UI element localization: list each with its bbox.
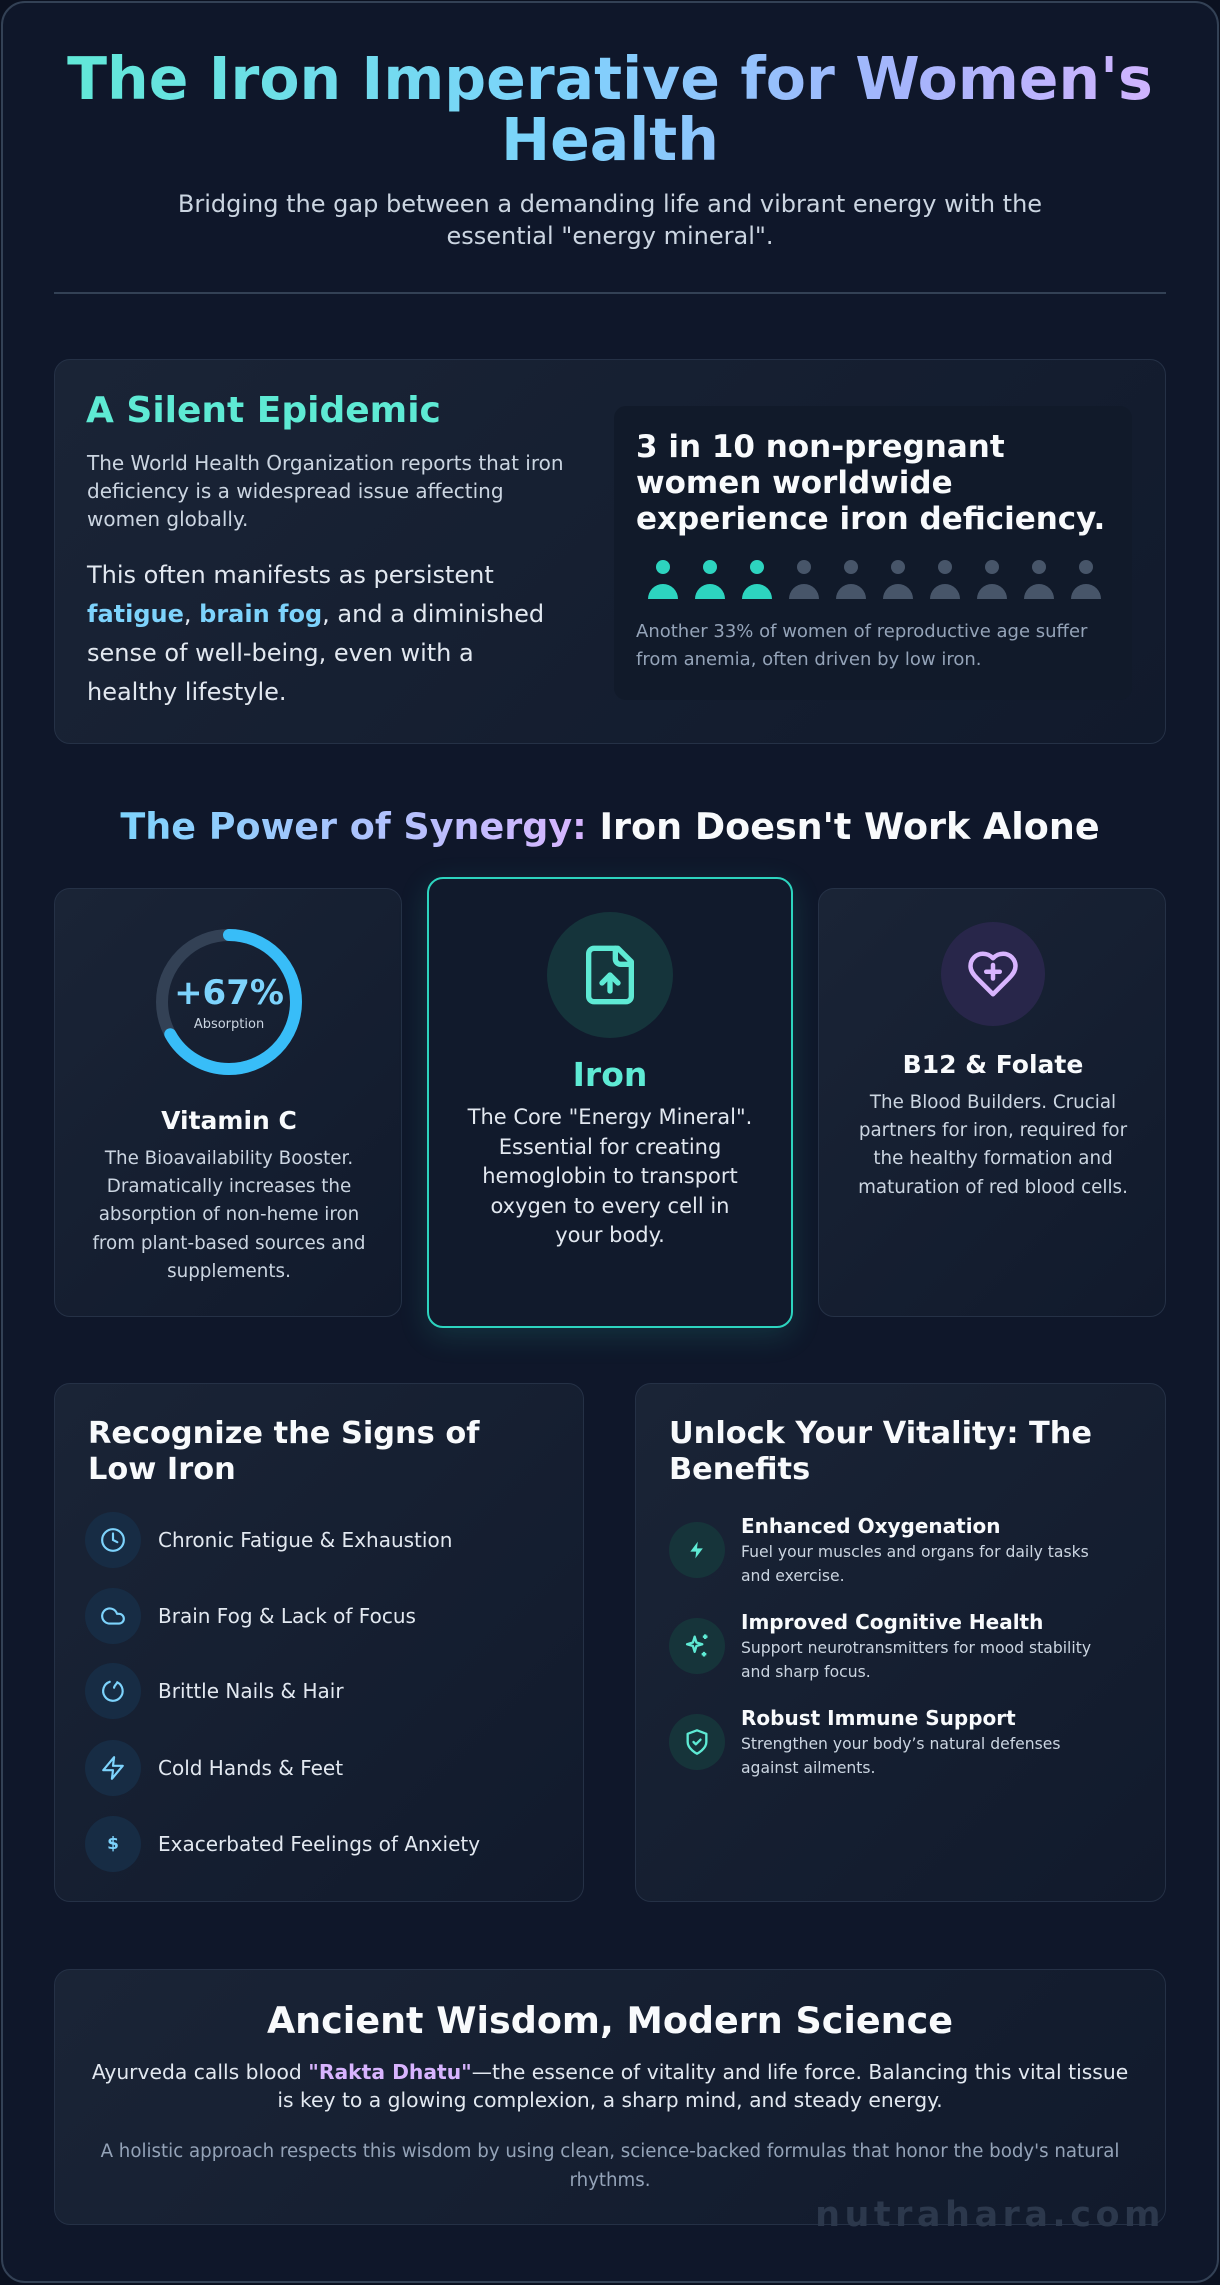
stat box (614, 406, 1132, 700)
benefit: oxygenation: Enhanced Oxygenation (741, 1514, 1001, 1538)
panel: signs of low iron (54, 1383, 584, 1902)
text: holistic: A holistic approach respects this wisdom by using clean, science-backed formulas that honor the body's natural rhythms. (101, 2141, 1119, 2191)
heading: Recognize the Signs of Low Iron (88, 1416, 479, 1487)
benefit: cognitive: Support neurotransmitters for mood stability and sharp focus. (741, 1639, 1091, 1681)
icon: heart plus (941, 922, 1045, 1026)
panel: benefits (635, 1383, 1166, 1902)
benefit: oxygenation (669, 1514, 1089, 1585)
card: iron (427, 877, 793, 1328)
benefit: oxygenation: Fuel your muscles and organs for daily tasks and exercise. (741, 1543, 1089, 1585)
panel: silent epidemic (54, 359, 1166, 744)
panel: ancient wisdom (54, 1969, 1166, 2225)
donut chart: +67% (174, 973, 284, 1013)
benefit: immune: Robust Immune Support (741, 1706, 1016, 1730)
synergy heading: The Power of Synergy: Iron Doesn't Work Alone (120, 805, 1100, 848)
sign: nails (85, 1663, 344, 1719)
title: The Iron Imperative for Women's Health (67, 45, 1153, 174)
text: symptoms: This often manifests as persistent fatigue, brain fog, and a diminished sense of well-being, even with a healthy lifestyle. (87, 561, 544, 706)
people icons (648, 560, 1101, 599)
card: b12 folate (818, 888, 1166, 1317)
sign: fatigue (85, 1512, 452, 1568)
title: Iron (573, 1055, 647, 1094)
title: Vitamin C (161, 1106, 297, 1135)
text: WHO report: The World Health Organization reports that iron deficiency is a widespread issue affecting women globally. (87, 451, 564, 531)
sign: cold (85, 1740, 343, 1796)
donut chart (156, 929, 302, 1075)
sign: brain fog (85, 1588, 416, 1644)
benefit: cognitive (669, 1610, 1091, 1681)
donut chart: Absorption (194, 1017, 264, 1032)
benefit: immune: Strengthen your body’s natural defenses against ailments. (741, 1735, 1061, 1777)
card: vitamin c (54, 888, 402, 1317)
sign: brain fog: Brain Fog & Lack of Focus (158, 1604, 416, 1628)
description: The Blood Builders. Crucial partners for iron, required for the healthy formation and maturation of red blood cells. (858, 1092, 1128, 1198)
title: B12 & Folate (903, 1050, 1083, 1079)
sign: anxiety (85, 1816, 480, 1872)
description: The Bioavailability Booster. Dramatically increases the absorption of non-heme iron from plant-based sources and supplements. (92, 1148, 366, 1282)
sign: fatigue: Chronic Fatigue & Exhaustion (158, 1528, 452, 1552)
subtitle: Bridging the gap between a demanding life and vibrant energy with the essential "energy mineral". (178, 190, 1042, 250)
heading: A Silent Epidemic: A Silent Epidemic (86, 390, 441, 431)
icon: file up (547, 912, 673, 1038)
sign list (85, 1512, 480, 1872)
heading: Unlock Your Vitality: The Benefits (669, 1416, 1092, 1487)
benefit: immune (669, 1706, 1061, 1777)
heading: Ancient Wisdom, Modern Science (267, 1999, 953, 2042)
watermark: nutrahara.com (815, 2195, 1165, 2235)
footnote: Another 33% of women of reproductive age suffer from anemia, often driven by low iron. (636, 621, 1087, 670)
sign: anxiety: $ (107, 1834, 119, 1854)
benefit: cognitive: Improved Cognitive Health (741, 1610, 1043, 1634)
text: ayurveda: Ayurveda calls blood "Rakta Dhatu"—the essence of vitality and life force. Balancing this vital tissue is key to a glowing complexion, a sharp mind, and steady energy. (92, 2060, 1128, 2112)
sign: cold: Cold Hands & Feet (158, 1756, 343, 1780)
sign: anxiety: Exacerbated Feelings of Anxiety (158, 1832, 480, 1856)
sign: nails: Brittle Nails & Hair (158, 1679, 344, 1703)
description: The Core "Energy Mineral". Essential for creating hemoglobin to transport oxygen to every cell in your body. (468, 1105, 752, 1247)
stat heading: 3 in 10 non-pregnant women worldwide experience iron deficiency. (636, 429, 1105, 537)
